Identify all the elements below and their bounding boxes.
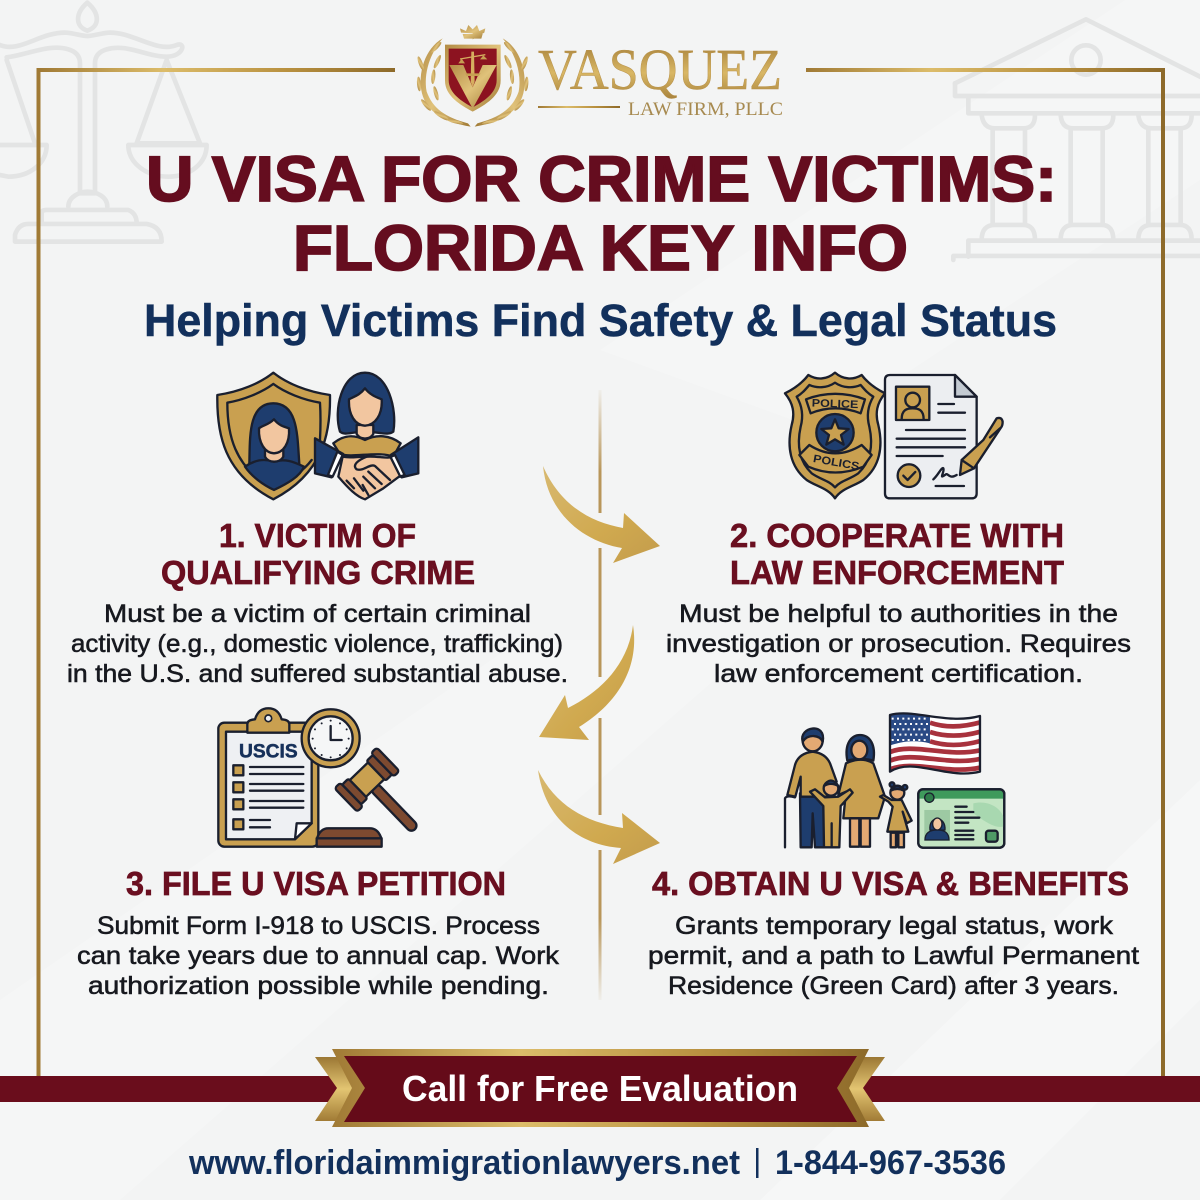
- icon: green card: [918, 789, 1004, 848]
- step 1 text: Must be a victim of certain criminal: [104, 600, 531, 628]
- watermark: courthouse: [953, 19, 1200, 260]
- step 1 text: activity (e.g., domestic violence, trafficking): [71, 630, 563, 658]
- title: U VISA FOR CRIME VICTIMS:: [146, 143, 1057, 215]
- step 3 heading: 3. FILE U VISA PETITION: [126, 865, 506, 902]
- step 1 heading: QUALIFYING CRIME: [161, 554, 475, 591]
- icon: police badge and document: [785, 373, 1003, 498]
- arrow: step 3 to step 4: [538, 770, 660, 864]
- step 4 text: permit, and a path to Lawful Permanent: [648, 942, 1139, 970]
- step 4 text: Grants temporary legal status, work: [675, 912, 1114, 940]
- icon: shield and handshake: [217, 373, 418, 499]
- icon: gavel: [335, 748, 436, 850]
- arrow: step 1 to step 2: [543, 466, 660, 563]
- title: [146, 143, 1057, 284]
- step 4 text: [648, 912, 1139, 1000]
- icon: family, flag and green card: [785, 707, 1004, 848]
- icon: American flag: [888, 712, 982, 775]
- step 1 heading: 1. VICTIM OF: [219, 517, 416, 554]
- icon: police badge and document: POLICS: [812, 453, 860, 473]
- step 2 heading: [730, 517, 1064, 591]
- arrow: step 2 to step 3: [539, 625, 634, 740]
- step 1 heading: [161, 517, 475, 591]
- step 3 text: can take years due to annual cap. Work: [77, 942, 560, 970]
- step 2 text: law enforcement certification.: [714, 660, 1083, 688]
- subtitle: Helping Victims Find Safety & Legal Status: [144, 295, 1057, 346]
- step 2 text: [666, 600, 1131, 688]
- panel: step 2: [666, 373, 1131, 688]
- step 3 text: [77, 912, 560, 1000]
- icon: USCIS clipboard, clock and gavel: [218, 708, 436, 850]
- center divider: [598, 390, 602, 1000]
- step 4 text: Residence (Green Card) after 3 years.: [668, 972, 1119, 1000]
- step 2 heading: LAW ENFORCEMENT: [730, 554, 1064, 591]
- call to action text: Call for Free Evaluation: [402, 1068, 798, 1109]
- step 2 text: investigation or prosecution. Requires: [666, 630, 1131, 658]
- step 3 text: authorization possible while pending.: [88, 972, 549, 1000]
- logo: Vasquez Law Firm: [416, 25, 783, 127]
- icon: police badge and document: POLICE: [812, 398, 859, 411]
- step 1 text: [67, 600, 568, 688]
- gold frame: [38, 70, 1163, 1076]
- logo: Vasquez Law Firm: LAW FIRM, PLLC: [628, 99, 783, 120]
- footer contact line: 1-844-967-3536: [775, 1144, 1006, 1182]
- title: FLORIDA KEY INFO: [293, 212, 908, 284]
- call to action ribbon: [0, 1049, 1200, 1127]
- footer contact line: www.floridaimmigrationlawyers.net: [188, 1144, 740, 1182]
- panel: step 3: [77, 708, 560, 1000]
- logo emblem: [416, 25, 529, 127]
- step 1 text: in the U.S. and suffered substantial abuse.: [67, 660, 568, 688]
- watermark: scales of justice: [0, 3, 207, 242]
- logo wordmark: VASQUEZ: [538, 37, 782, 102]
- panel: step 1: [67, 373, 568, 688]
- step 2 text: Must be helpful to authorities in the: [679, 600, 1118, 628]
- step 4 heading: 4. OBTAIN U VISA & BENEFITS: [652, 865, 1129, 902]
- step 3 text: Submit Form I-918 to USCIS. Process: [97, 912, 540, 940]
- icon: USCIS clipboard, clock and gavel: USCIS: [239, 741, 298, 762]
- step 2 heading: 2. COOPERATE WITH: [730, 517, 1064, 554]
- panel: step 4: [648, 707, 1139, 1000]
- footer contact line: [188, 1144, 1006, 1182]
